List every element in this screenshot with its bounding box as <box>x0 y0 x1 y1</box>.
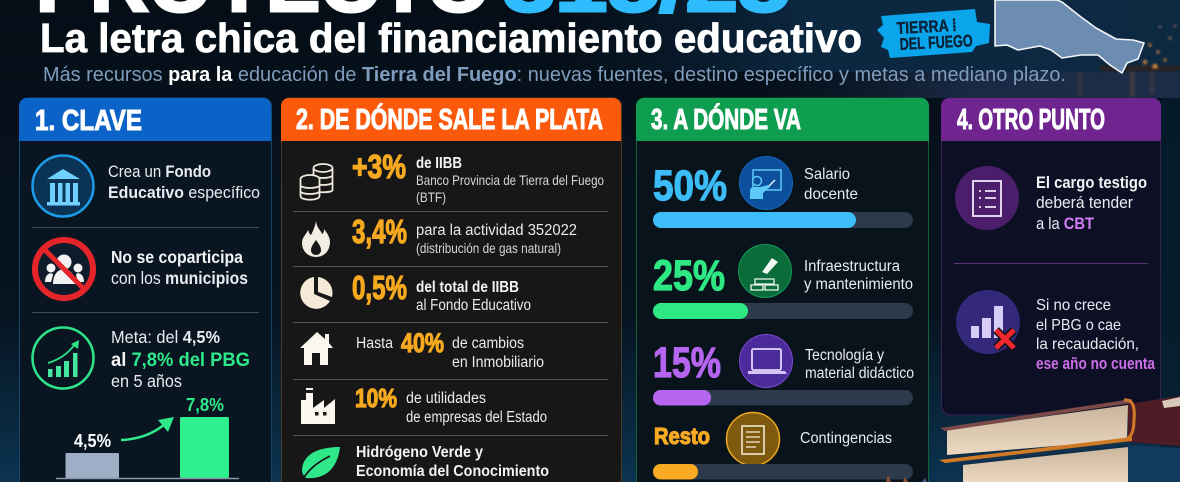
progress bar: resto <box>653 464 913 480</box>
row: 0,5% <box>352 269 531 314</box>
row: 15% tecnología: 15% <box>653 339 721 387</box>
text: Fondo Educativo: Crea un Fondo <box>108 162 211 181</box>
row: +3% IIBB: (BTF) <box>416 189 446 205</box>
panel: 1. Clave <box>19 98 272 482</box>
row: 50% salario docente: docente <box>804 186 858 203</box>
intro text: Más recursos para la educación de Tierra del Fuego: nuevas fuentes, destino específico y metas a mediano plazo. <box>43 64 1066 86</box>
row: 3,4% <box>352 213 577 256</box>
text: si no crece: la recaudación, <box>1036 336 1139 353</box>
icon: Tierra del Fuego map <box>995 0 1144 73</box>
text: cargo testigo: deberá tender <box>1036 194 1133 212</box>
progress bar: 25% <box>653 303 913 319</box>
text: no se coparticipa: con los municipios <box>111 268 248 288</box>
row: 50% salario docente <box>653 156 913 228</box>
text: Fondo Educativo: Educativo específico <box>108 183 260 202</box>
panel header: 2 <box>281 98 621 141</box>
row: 15% tecnología: Tecnología y <box>805 347 884 364</box>
row: 15% tecnología: material didáctico <box>805 365 914 382</box>
icon: laptop <box>740 334 792 388</box>
row: 40%: en Inmobiliario <box>452 354 544 371</box>
row: +3% IIBB: de IIBB <box>416 155 462 172</box>
arrow <box>121 417 174 440</box>
panel header: 1. Clave <box>19 98 271 141</box>
row: 0,5%: del total de IIBB <box>416 279 519 296</box>
panel header: 3 <box>636 98 929 141</box>
row: 10% <box>355 383 547 426</box>
progress bar: 50% <box>653 212 913 228</box>
heading: 2: 2. DE DÓNDE SALE LA PLATA <box>296 102 603 136</box>
icon: failed growth <box>956 290 1020 354</box>
row: 40%: de cambios <box>452 335 524 352</box>
row: 25% infraestructura: 25% <box>653 252 725 300</box>
text: no se coparticipa <box>111 247 248 288</box>
row: +3% IIBB: +3% <box>352 148 406 185</box>
text: meta: al 7,8% del PBG <box>111 350 250 371</box>
badge: Tierra del Fuego: TIERRA ⁞ <box>896 16 957 38</box>
text: si no crece: el PBG o cae <box>1036 317 1121 334</box>
icon: factory <box>301 388 335 424</box>
row: 10%: de empresas del Estado <box>406 409 547 426</box>
illustration: books <box>939 396 1180 482</box>
candle flames <box>886 475 927 482</box>
badge: Tierra del Fuego: DEL FUEGO <box>899 31 973 54</box>
icon: bank <box>32 156 94 216</box>
text: meta: Meta: del 4,5% <box>111 327 220 347</box>
text: cargo testigo: El cargo testigo <box>1036 174 1147 192</box>
icon: pie chart <box>300 277 333 309</box>
row: 10%: de utilidades <box>406 390 486 407</box>
text: si no crece: Si no crece <box>1036 297 1111 314</box>
row: 25% infraestructura: y mantenimiento <box>804 276 913 293</box>
panel header: 4 <box>941 98 1161 141</box>
row: +3% IIBB <box>352 148 604 205</box>
row: 3,4%: para la actividad 352022 <box>416 222 577 239</box>
row: hidrógeno verde: Hidrógeno Verde y <box>356 444 483 461</box>
text: Fondo Educativo <box>108 162 260 202</box>
icon: flame <box>302 221 330 257</box>
badge: Tierra del Fuego <box>877 9 990 58</box>
icon: checklist <box>955 166 1019 230</box>
row: 25% infraestructura: Infraestructura <box>804 258 900 275</box>
row: 25% infraestructura <box>653 244 913 319</box>
icon: house <box>300 332 333 365</box>
icon: growth <box>32 328 94 388</box>
panel: 4. Otro punto <box>941 98 1161 415</box>
icon: no coparticipation <box>35 240 93 298</box>
row: 0,5%: al Fondo Educativo <box>416 297 531 314</box>
heading: 4: 4. OTRO PUNTO <box>957 104 1105 136</box>
row: 3,4%: 3,4% <box>352 213 407 250</box>
panel: 3. A dónde va <box>636 98 929 482</box>
row: +3% IIBB: Banco Provincia de Tierra del Fuego <box>416 172 604 188</box>
row: resto contingencias: Resto <box>654 423 710 449</box>
row: 50% salario docente: Salario <box>804 166 850 183</box>
row: 40% <box>356 328 544 371</box>
text: si no crece <box>1036 297 1156 373</box>
icon: leaf <box>301 447 340 482</box>
bar chart: 4,5% to 7,8% <box>56 395 239 478</box>
heading: 3: 3. A DÓNDE VA <box>651 102 801 136</box>
heading: 1. Clave: 1. CLAVE <box>35 105 142 137</box>
row: resto contingencias: Contingencias <box>800 430 892 447</box>
row: hidrógeno verde: Economía del Conocimiento <box>356 463 549 480</box>
row: resto contingencias <box>653 412 913 480</box>
row: 15% tecnología <box>653 334 914 406</box>
label: 4,5%: 4,5% <box>74 431 111 451</box>
text: si no crece: ese año no cuenta <box>1036 355 1156 373</box>
row: 40%: 40% <box>401 328 444 358</box>
text: cargo testigo: a la CBT <box>1036 215 1094 233</box>
icon: bricks and trowel <box>738 244 792 298</box>
text: no se coparticipa: No se coparticipa <box>111 247 243 267</box>
text: meta <box>111 327 250 391</box>
text: cargo testigo <box>1036 174 1147 233</box>
icon: coins <box>300 164 332 200</box>
row: 50% salario docente: 50% <box>653 162 727 210</box>
title <box>36 0 790 28</box>
row: 3,4%: (distribución de gas natural) <box>416 240 561 256</box>
icon: teacher <box>740 156 792 210</box>
icon: document <box>726 412 780 466</box>
row: hidrógeno verde <box>356 444 549 480</box>
row: 40%: Hasta <box>356 335 393 352</box>
subtitle heading: La letra chica del financiamiento educativo <box>40 15 862 61</box>
row: 0,5%: 0,5% <box>352 269 407 306</box>
text: meta: en 5 años <box>111 371 182 391</box>
panel: 2. De dónde sale la plata <box>281 98 622 482</box>
progress bar: 15% <box>653 390 913 406</box>
label: 7,8%: 7,8% <box>186 395 224 415</box>
row: 10%: 10% <box>355 383 397 413</box>
